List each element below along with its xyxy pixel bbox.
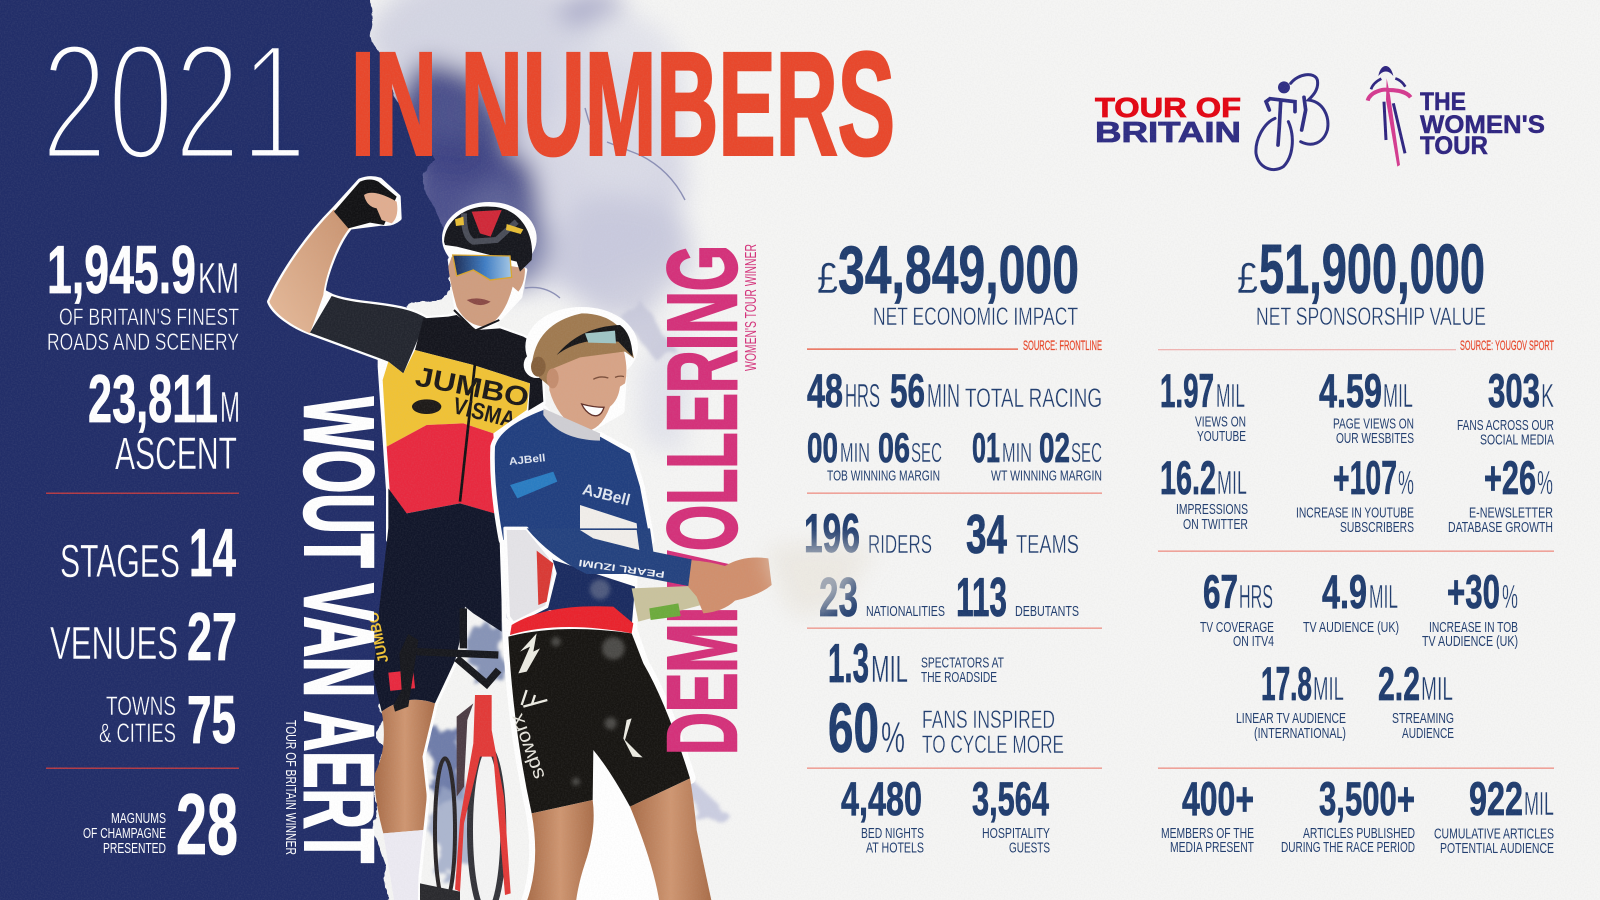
stat: net economic impact: 34,849,000 bbox=[838, 232, 1079, 308]
logo: The Women's Tour bbox=[1368, 66, 1545, 167]
stat: net sponsorship value: £ bbox=[1237, 254, 1258, 303]
stat: youtube views bbox=[1160, 364, 1246, 445]
stat: articles published bbox=[1281, 772, 1415, 856]
stat: nationalities: NATIONALITIES bbox=[866, 603, 945, 620]
stat: media present: MEMBERS OF THE bbox=[1161, 825, 1254, 842]
stat: social fans: 303 bbox=[1488, 364, 1540, 417]
stat: TV audience increase: TV AUDIENCE (UK) bbox=[1422, 633, 1518, 650]
panel: economic impact column bbox=[804, 232, 1102, 856]
background: watercolour blotches bbox=[428, 300, 724, 900]
background: watercolour streaks bbox=[525, 108, 685, 298]
rider: Wout van Aert: JUMBO bbox=[366, 610, 392, 664]
stat: youtube subscribers: INCREASE IN YOUTUBE bbox=[1296, 504, 1414, 522]
stat: TV audience UK: TV AUDIENCE (UK) bbox=[1303, 619, 1399, 636]
rider: Wout van Aert bbox=[269, 178, 543, 900]
stat: TV coverage: HRS bbox=[1239, 578, 1273, 615]
stat: e-newsletter growth: DATABASE GROWTH bbox=[1448, 519, 1553, 536]
stat: spectators: THE ROADSIDE bbox=[921, 669, 997, 686]
stat: e-newsletter growth: +26 bbox=[1484, 451, 1536, 504]
stat: spectators: MIL bbox=[871, 649, 908, 691]
stat: venues bbox=[50, 599, 237, 675]
stat: linear TV audience: 17.8 bbox=[1261, 657, 1312, 710]
stat: youtube views: MIL bbox=[1216, 377, 1245, 414]
stat: ToB winning margin: TOB WINNING MARGIN bbox=[827, 468, 940, 484]
stat: ToB winning margin: 00 bbox=[807, 424, 838, 471]
name: Demi Vollering bbox=[647, 244, 760, 755]
stat: net sponsorship value: NET SPONSORSHIP VALUE bbox=[1256, 303, 1486, 331]
stat: fans inspired: % bbox=[881, 713, 905, 762]
icon: rider emblem bbox=[1368, 66, 1411, 167]
stat: linear TV audience: LINEAR TV AUDIENCE bbox=[1236, 710, 1346, 727]
rider jacket bbox=[495, 410, 650, 540]
stat: media present: 400+ bbox=[1182, 772, 1254, 825]
rider hair bbox=[532, 313, 634, 387]
stat: twitter impressions: MIL bbox=[1217, 464, 1247, 501]
stat: stages: 14 bbox=[189, 515, 236, 591]
rider outline bbox=[269, 178, 543, 540]
rider: Demi Vollering, upper body bbox=[495, 312, 772, 786]
stat: WT winning margin: 01 bbox=[972, 424, 1000, 471]
stat: champagne: 28 bbox=[176, 777, 238, 873]
stat: ascent: ASCENT bbox=[115, 428, 237, 479]
stat: ascent bbox=[88, 361, 240, 479]
stat: TV coverage: 67 bbox=[1203, 565, 1238, 618]
logo: Tour of Britain bbox=[1095, 75, 1328, 170]
rider: Demi Vollering, upper body: AJBell bbox=[508, 452, 546, 468]
logo: The Women's Tour: THE bbox=[1420, 88, 1466, 116]
stat: towns and cities: 75 bbox=[187, 682, 236, 758]
rider arm bbox=[269, 209, 350, 333]
stat: potential audience bbox=[1434, 772, 1554, 857]
stat: total racing: 56 bbox=[890, 364, 925, 417]
rider: Wout van Aert: JUMBO bbox=[413, 360, 532, 413]
title bbox=[41, 10, 895, 195]
stat: page views: 4.59 bbox=[1319, 364, 1382, 417]
stat: ToB winning margin: MIN bbox=[840, 437, 870, 468]
logo: The Women's Tour: WOMEN'S bbox=[1420, 111, 1545, 139]
stat: champagne: OF CHAMPAGNE bbox=[83, 825, 166, 842]
stat: articles published: ARTICLES PUBLISHED bbox=[1303, 825, 1415, 842]
stat: net economic impact: SOURCE: FRONTLINE bbox=[1023, 337, 1102, 353]
stat: page views bbox=[1319, 364, 1414, 447]
stat: twitter impressions: ON TWITTER bbox=[1183, 516, 1248, 533]
stat: teams: TEAMS bbox=[1016, 529, 1079, 559]
stat: stages bbox=[60, 515, 236, 591]
rider sunglasses bbox=[557, 325, 633, 357]
stat: potential audience: MIL bbox=[1524, 785, 1554, 822]
stat: fans inspired: 60 bbox=[828, 689, 879, 767]
stat: media present bbox=[1161, 772, 1254, 856]
rider glove and fist bbox=[334, 179, 397, 228]
stat: net sponsorship value: 51,900,000 bbox=[1259, 230, 1485, 308]
rider: Demi Vollering, upper body: AJBell bbox=[581, 481, 632, 510]
stat: TV coverage: ON ITV4 bbox=[1233, 633, 1274, 650]
bottle bbox=[632, 586, 705, 622]
rider hands bbox=[687, 558, 772, 613]
stat: TV coverage bbox=[1200, 565, 1274, 650]
stat: twitter impressions: IMPRESSIONS bbox=[1176, 501, 1248, 518]
stat: youtube subscribers bbox=[1296, 451, 1414, 536]
stat: fans inspired bbox=[828, 689, 1064, 767]
stat: youtube views: 1.97 bbox=[1160, 364, 1214, 417]
stat: venues: 27 bbox=[187, 599, 237, 675]
stat: TV audience increase: INCREASE IN TOB bbox=[1429, 619, 1518, 636]
stat: towns and cities bbox=[99, 682, 236, 758]
name: Demi Vollering: WOMEN'S TOUR WINNER bbox=[743, 244, 760, 371]
stat: streaming audience: STREAMING bbox=[1392, 710, 1454, 727]
stat: TV audience UK: MIL bbox=[1369, 578, 1398, 615]
stat: WT winning margin: 02 bbox=[1039, 424, 1070, 471]
stat: page views: MIL bbox=[1383, 377, 1413, 414]
stat: fans inspired: TO CYCLE MORE bbox=[922, 731, 1064, 759]
stat: TV audience UK bbox=[1303, 565, 1399, 636]
stat: champagne: MAGNUMS bbox=[111, 810, 166, 827]
stat: ToB winning margin: 06 bbox=[878, 424, 910, 471]
rider face bbox=[448, 257, 525, 327]
stat: page views: PAGE VIEWS ON bbox=[1333, 416, 1414, 432]
stat: total racing: MIN bbox=[927, 377, 960, 414]
rider: Wout van Aert: VISMA bbox=[450, 392, 518, 433]
rider jersey bbox=[415, 315, 543, 411]
stat: debutants: DEBUTANTS bbox=[1015, 603, 1079, 620]
stat: twitter impressions: 16.2 bbox=[1160, 451, 1216, 504]
stat: WT winning margin: WT WINNING MARGIN bbox=[991, 468, 1102, 484]
stat: ascent: M bbox=[220, 383, 240, 432]
stat: bed nights bbox=[841, 772, 924, 856]
stat: net economic impact: £ bbox=[817, 254, 838, 303]
rider legs bbox=[375, 700, 435, 833]
stat: total racing bbox=[807, 364, 1102, 417]
panel: sponsorship column bbox=[1158, 230, 1554, 857]
stat: net sponsorship value bbox=[1158, 230, 1554, 353]
background: navy panel bbox=[0, 0, 450, 900]
rider helmet bbox=[444, 207, 532, 272]
stat: streaming audience: AUDIENCE bbox=[1402, 725, 1454, 742]
stat: champagne bbox=[83, 777, 238, 873]
rider outline edge bbox=[419, 630, 464, 900]
stat: WT winning margin: MIN bbox=[1002, 437, 1032, 468]
rider shorts bbox=[508, 629, 690, 813]
stat: youtube views: YOUTUBE bbox=[1197, 428, 1246, 445]
stat: articles published: DURING THE RACE PERIOD bbox=[1281, 839, 1415, 856]
stat: fans inspired: FANS INSPIRED bbox=[922, 706, 1055, 734]
stat: ToB winning margin: SEC bbox=[911, 437, 942, 468]
stat: ascent: 23,811 bbox=[88, 361, 218, 437]
stat: distance: ROADS AND SCENERY bbox=[47, 329, 239, 356]
stat: debutants: 113 bbox=[956, 566, 1007, 628]
stat: social fans bbox=[1457, 364, 1554, 448]
stat: nationalities: 23 bbox=[819, 566, 858, 628]
rider: Demi Vollering, lower body: sdworx bbox=[506, 710, 550, 782]
stat: streaming audience bbox=[1378, 657, 1454, 742]
stat: social fans: SOCIAL MEDIA bbox=[1480, 432, 1554, 448]
stat: distance: OF BRITAIN'S FINEST bbox=[59, 304, 239, 331]
rider side panel and waist bbox=[505, 528, 635, 627]
background: watercolour wash bbox=[370, 0, 700, 450]
icon: cyclist bbox=[1256, 75, 1328, 170]
stat: linear TV audience bbox=[1236, 657, 1346, 742]
stat: spectators: SPECTATORS AT bbox=[921, 654, 1004, 672]
stat: TV coverage: TV COVERAGE bbox=[1200, 619, 1274, 636]
title: in numbers: IN NUMBERS bbox=[351, 22, 895, 186]
stat: teams bbox=[966, 503, 1079, 565]
stat: linear TV audience: MIL bbox=[1313, 670, 1344, 707]
stat: hospitality guests bbox=[972, 772, 1050, 856]
panel: route stats bbox=[46, 232, 240, 873]
stat: venues: VENUES bbox=[50, 617, 178, 669]
stat: e-newsletter growth: % bbox=[1537, 464, 1553, 501]
rider: Demi Vollering, upper body: PEARL IZUMI bbox=[578, 558, 665, 580]
stat: social fans: K bbox=[1541, 377, 1554, 414]
stat: bed nights: 4,480 bbox=[841, 772, 922, 825]
rider outline bbox=[505, 530, 690, 900]
stat: potential audience: 922 bbox=[1469, 772, 1523, 825]
stat: bed nights: BED NIGHTS bbox=[861, 825, 924, 842]
rider sunglasses bbox=[453, 255, 512, 280]
logo: Tour of Britain: BRITAIN bbox=[1095, 117, 1241, 149]
stat: potential audience: POTENTIAL AUDIENCE bbox=[1440, 840, 1554, 857]
stat: hospitality guests: HOSPITALITY bbox=[982, 825, 1050, 842]
stat: net economic impact bbox=[807, 232, 1102, 353]
stat: teams: 34 bbox=[966, 503, 1007, 565]
stat: youtube views: VIEWS ON bbox=[1195, 414, 1246, 430]
stat: champagne: PRESENTED bbox=[103, 840, 166, 857]
stat: TV audience UK: 4.9 bbox=[1322, 565, 1367, 618]
stat: youtube subscribers: % bbox=[1398, 464, 1414, 501]
stat: net economic impact: NET ECONOMIC IMPACT bbox=[873, 303, 1078, 331]
stat: articles published: 3,500+ bbox=[1319, 772, 1415, 825]
stat: social fans: FANS ACROSS OUR bbox=[1457, 417, 1554, 434]
stat: linear TV audience: (INTERNATIONAL) bbox=[1254, 725, 1346, 742]
stat: e-newsletter growth bbox=[1448, 451, 1553, 536]
stat: nationalities bbox=[819, 566, 945, 628]
stat: hospitality guests: GUESTS bbox=[1009, 840, 1050, 856]
stat: WT winning margin: SEC bbox=[1071, 437, 1102, 468]
stat: distance bbox=[47, 232, 239, 356]
rider legs bbox=[527, 800, 594, 900]
stat: total racing: TOTAL RACING bbox=[965, 383, 1102, 413]
stat: media present: MEDIA PRESENT bbox=[1170, 839, 1254, 856]
mist droplets bbox=[551, 579, 625, 786]
stat: youtube subscribers: SUBSCRIBERS bbox=[1340, 519, 1414, 536]
stat: WT winning margin bbox=[972, 424, 1102, 484]
stat: twitter impressions bbox=[1160, 451, 1248, 533]
stat: streaming audience: MIL bbox=[1421, 670, 1453, 707]
rider: Demi Vollering, lower body bbox=[505, 530, 712, 900]
stat: TV audience increase: +30 bbox=[1447, 565, 1500, 618]
stat: page views: OUR WESBITES bbox=[1336, 430, 1414, 447]
title: year: 2021 bbox=[41, 10, 307, 195]
rider sleeve bbox=[527, 528, 692, 586]
stat: riders: 196 bbox=[804, 502, 860, 564]
stat: stages: STAGES bbox=[60, 535, 180, 587]
stat: ToB winning margin bbox=[807, 424, 942, 484]
stat: distance: KM bbox=[198, 254, 239, 303]
stat: towns and cities: TOWNS bbox=[106, 691, 176, 721]
bike bbox=[393, 608, 511, 900]
stat: total racing: HRS bbox=[845, 377, 880, 414]
rider shorts bbox=[373, 528, 502, 712]
stat: spectators bbox=[828, 632, 1004, 694]
stat: riders: RIDERS bbox=[868, 529, 932, 559]
stat: TV audience increase: % bbox=[1502, 578, 1518, 615]
effect: champagne spray bbox=[765, 542, 880, 616]
stat: streaming audience: 2.2 bbox=[1378, 657, 1420, 710]
stat: towns and cities: & CITIES bbox=[99, 718, 176, 748]
stat: hospitality guests: 3,564 bbox=[972, 772, 1049, 825]
stat: youtube subscribers: +107 bbox=[1333, 451, 1397, 504]
stat: distance: 1,945.9 bbox=[47, 232, 196, 308]
logo: Tour of Britain: TOUR OF bbox=[1095, 92, 1241, 123]
stat: total racing: 48 bbox=[807, 364, 843, 417]
rider face bbox=[549, 352, 626, 432]
stat: e-newsletter growth: E-NEWSLETTER bbox=[1469, 504, 1553, 522]
stat: spectators: 1.3 bbox=[828, 632, 869, 694]
stat: bed nights: AT HOTELS bbox=[866, 840, 924, 856]
rider outline bbox=[495, 312, 650, 540]
logo: The Women's Tour: TOUR bbox=[1420, 132, 1488, 160]
stat: TV audience increase bbox=[1422, 565, 1518, 650]
